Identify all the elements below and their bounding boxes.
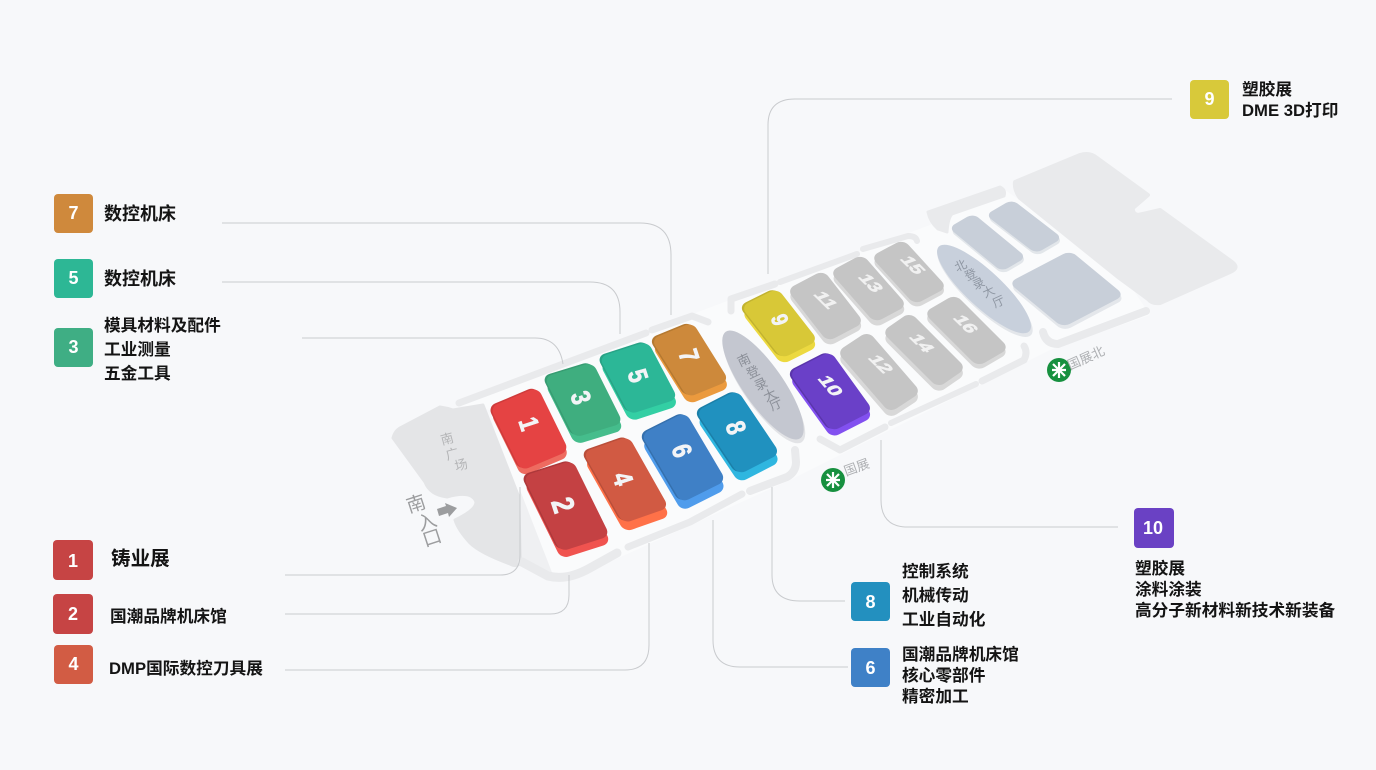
legend: 6: [851, 644, 1019, 706]
hall 1: [487, 386, 571, 477]
legend: 10: [1134, 508, 1336, 620]
hall 10: 10: [813, 373, 847, 399]
legend: 9: 塑胶展: [1242, 79, 1292, 99]
hall 6: [637, 411, 730, 511]
hall 2: 2: [545, 493, 581, 517]
legend: 9: DME 3D打印: [1242, 100, 1338, 120]
legend: 8: 机械传动: [902, 586, 969, 605]
hall 7: 7: [672, 346, 704, 366]
legend: 3: 五金工具: [104, 363, 171, 383]
perimeter walls: [459, 187, 1146, 577]
legend: 7: [54, 194, 176, 233]
hall 1: 1: [512, 414, 544, 434]
metro station: 国展: 国展: [842, 456, 871, 479]
legend: 2: 2: [68, 604, 78, 624]
legend: 5: [54, 259, 176, 298]
icon: metro logo: [821, 468, 845, 492]
hall 9: 9: [765, 311, 793, 329]
hall 4: 4: [606, 469, 638, 490]
legend: 8: 控制系统: [902, 561, 969, 581]
hall 5: [596, 340, 681, 422]
north hall block A: [947, 213, 1029, 274]
legend: 3: 3: [68, 337, 79, 357]
legend: 2: [53, 594, 227, 634]
legend: 10: 塑胶展: [1135, 558, 1185, 578]
north login hall: 北登录大厅: [952, 257, 1007, 311]
legend: 8: [851, 561, 986, 629]
hall 13: [827, 254, 911, 328]
hall 13: 13: [854, 272, 888, 294]
legend: 10: 涂料涂装: [1135, 579, 1202, 599]
legend: 6: 国潮品牌机床馆: [902, 644, 1019, 664]
north login hall: [926, 234, 1043, 348]
legend: 10: 高分子新材料新技术新装备: [1135, 600, 1336, 620]
legend: 5: 数控机床: [104, 268, 176, 289]
legend: 9: [1190, 79, 1338, 120]
plaza edge strip: [520, 490, 553, 575]
legend: 4: 4: [68, 654, 79, 674]
legend: 7: 7: [68, 203, 79, 223]
hall 9: [737, 287, 822, 365]
hall 8: 8: [719, 418, 751, 438]
hall 11: [784, 270, 867, 347]
legend: 8: 工业自动化: [902, 609, 986, 629]
north hall area: [1015, 154, 1236, 303]
south login hall: 南登录大厅: [735, 351, 785, 414]
hall 11: 11: [809, 289, 843, 311]
north hall block C: [1006, 250, 1128, 331]
legend: 6: 6: [865, 658, 876, 678]
south entrance label: 南入口: [404, 491, 445, 552]
metro station: 国展北: 国展北: [1065, 343, 1107, 373]
hall 10: [785, 350, 877, 438]
hall 12: 12: [864, 353, 898, 375]
legend: 7: 数控机床: [104, 203, 176, 224]
legend: 1: 1: [68, 551, 78, 571]
hall 5: 5: [621, 366, 653, 386]
legend: 4: DMP国际数控刀具展: [109, 659, 263, 678]
hall 15: 15: [896, 254, 930, 276]
metro station: 国展: [821, 456, 871, 492]
legend: 4: [54, 645, 263, 684]
legend: 9: 9: [1204, 89, 1215, 109]
venue base map: [393, 154, 1236, 580]
legend: 5: 5: [68, 268, 79, 288]
leader lines: [222, 99, 1172, 670]
legend: 2: 国潮品牌机床馆: [110, 606, 227, 626]
hall 12: [834, 331, 925, 419]
hall 16: 16: [949, 313, 983, 335]
legend: 6: 精密加工: [902, 686, 969, 706]
hall 7: [647, 321, 733, 405]
hall 4: [579, 435, 673, 532]
legend: 3: 模具材料及配件: [104, 316, 221, 335]
hall 8: [691, 389, 784, 483]
south plaza: [393, 405, 521, 566]
hall 15: [868, 239, 950, 309]
legend: 3: [54, 316, 221, 383]
north hall block B: [984, 199, 1065, 256]
south login hall: [709, 320, 818, 454]
icon: entrance arrow: [437, 503, 457, 517]
legend: 6: 核心零部件: [902, 665, 986, 685]
hall 2: [520, 459, 613, 559]
floor platform: [457, 190, 1150, 580]
legend: 3: 工业测量: [104, 340, 171, 359]
legend: 1: 铸业展: [111, 548, 170, 570]
hall 14: [878, 312, 970, 394]
icon: metro logo: [1047, 358, 1071, 382]
metro station: 国展北: [1047, 343, 1107, 382]
legend: 10: 10: [1143, 518, 1163, 538]
hall 14: 14: [905, 332, 939, 355]
hall 16: [921, 294, 1012, 371]
south plaza label: 南广场: [439, 430, 469, 474]
hall 6: 6: [665, 441, 697, 461]
legend: 8: 8: [865, 592, 876, 612]
hall 3: 3: [564, 388, 596, 408]
hall 3: [541, 361, 626, 445]
legend: 1: [53, 540, 170, 580]
